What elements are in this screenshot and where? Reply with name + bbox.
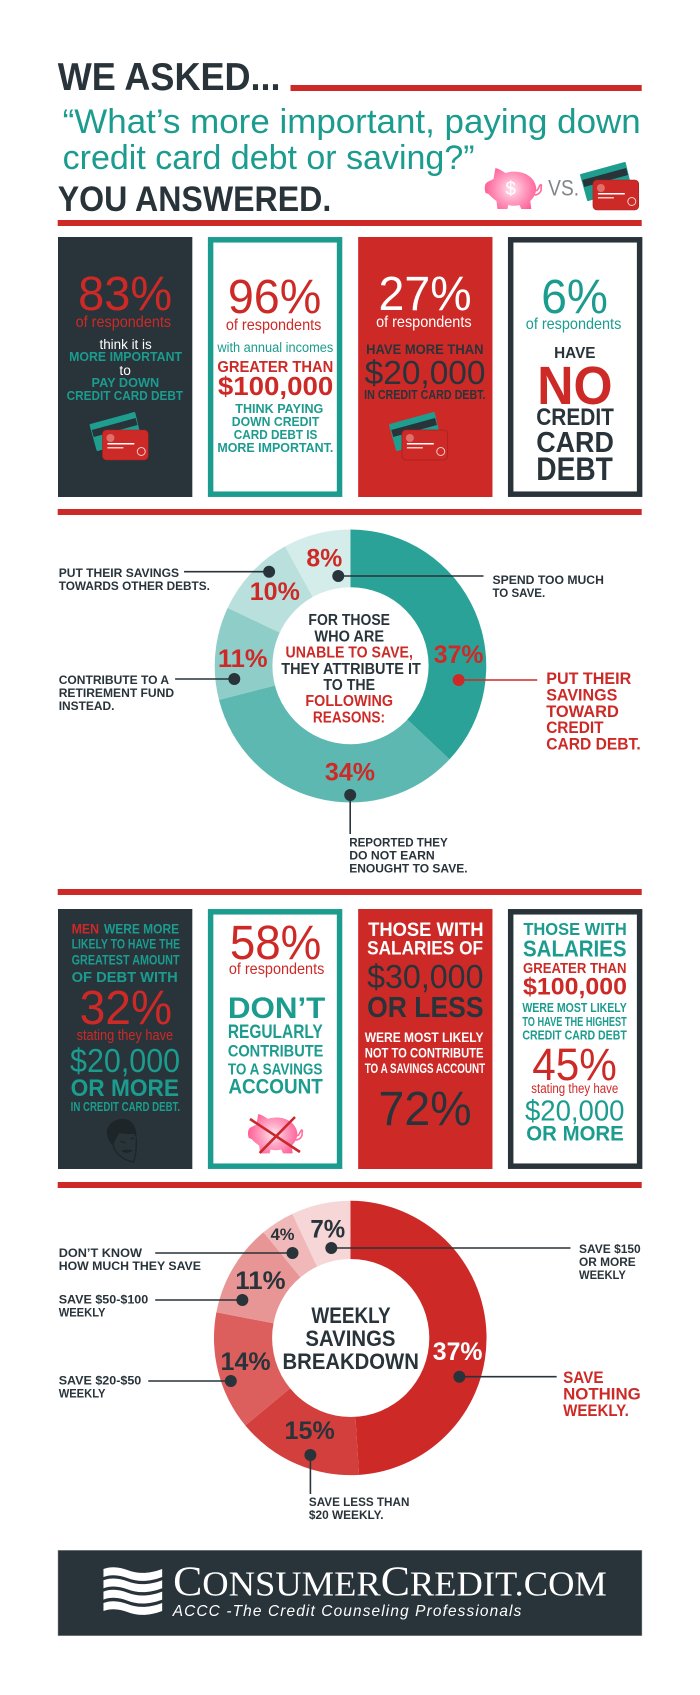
stat: 32%: 32% [80,982,172,1035]
text block: men were more likely: LIKELY TO HAVE THE [72,936,180,952]
value labels: 15% [285,1417,335,1445]
text: of respondents: of respondents [226,317,321,334]
icon: piggy bank [485,168,542,209]
panel: 58 percent [211,912,340,1166]
text: of respondents: of respondents [229,961,324,978]
center title: BREAKDOWN [283,1349,419,1374]
icon: credit cards [91,413,148,460]
slice 8% [285,530,351,666]
value labels: 37% [434,641,484,669]
text block: more important: think it is [99,336,152,352]
text block: $20,000 or more [70,1042,180,1114]
text: of respondents: of respondents [526,316,621,333]
callout: save nothing weekly [453,1369,641,1420]
text block: highest credit card debt [522,1001,627,1043]
text block: men were more likely: WERE MORE [104,921,179,937]
stat: 27%: 27% [379,268,472,321]
stat: 96%: 96% [228,271,321,324]
text block: don't regularly contribute: DON’T [228,992,325,1025]
callout: spend too much: TO SAVE. [492,586,545,600]
icon: crossed piggy bank [248,1114,302,1153]
callout: save nothing weekly: SAVE [563,1369,604,1387]
slice 7% [292,1201,351,1338]
text block: $20,000 or more: $20,000 [70,1042,180,1079]
text block: those with salaries: THOSE WITH [523,919,627,939]
stat: 58%: 58% [230,917,321,970]
callout: save $20-$50 [59,1374,237,1401]
text block: more important: to [119,362,131,378]
callout: other debts [59,566,275,593]
value labels: 34% [325,759,375,787]
text block: $20,000 or more: OR MORE [71,1075,179,1102]
center title: WEEKLY [311,1303,391,1328]
callout: credit card debt: CARD DEBT. [546,736,641,754]
question: “What’s more important, paying down [63,103,641,141]
callout: do not earn enough: ENOUGHT TO SAVE. [349,862,468,876]
text block: most likely not to contribute [365,1029,485,1076]
text block: $30,000 or less: $30,000 [367,958,484,995]
text block: those with salaries: SALARIES [523,936,626,962]
panel: men with debt [58,909,192,1169]
slice 15% [245,1338,359,1475]
text block: think paying: MORE IMPORTANT. [217,441,333,455]
text block: greater than $100,000: GREATER THAN [523,960,626,977]
callout: save $150 or more: OR MORE [579,1255,636,1269]
text: stating they have: stating they have [77,1027,173,1044]
callout: don't know: DON’T KNOW [59,1246,143,1260]
callout: save $20-$50: SAVE $20-$50 [59,1374,142,1388]
slice 11% [215,608,351,700]
text block: think paying: DOWN CREDIT [232,415,320,429]
text block: those with salaries of: SALARIES OF [367,939,483,960]
callout: other debts: TOWARDS OTHER DEBTS. [59,579,210,593]
callout: other debts: PUT THEIR SAVINGS [59,566,179,580]
center text: FOLLOWING [305,693,393,710]
text block: those with salaries of [367,920,484,960]
text block: most likely not to contribute: NOT TO CONTRIBUTE [365,1045,484,1061]
red rule [58,220,642,226]
text: stating they have: stating they have [531,1080,619,1096]
text block: think paying [217,402,333,455]
panel: 83 percent [58,237,192,497]
value labels: 8% [306,545,342,573]
callout: retirement fund [59,673,240,713]
slice 11% [216,1232,351,1338]
value labels: 11% [235,1267,286,1295]
text block: $20,000 or more: IN CREDIT CARD DEBT. [71,1100,180,1114]
callout: retirement fund: CONTRIBUTE TO A [59,673,169,687]
callout: save less than $20 [304,1449,409,1522]
donut chart: weekly savings breakdown [59,1201,641,1522]
footer logo band [58,1550,642,1636]
text block: men were more likely: GREATEST AMOUNT [72,952,180,968]
text block: have more than: IN CREDIT CARD DEBT. [364,388,486,402]
slice 14% [214,1312,351,1426]
text block: don't regularly contribute: TO A SAVINGS [228,1062,322,1079]
callout: don't know [59,1246,298,1273]
callout: credit card debt: TOWARD [546,703,619,721]
center text: REASONS: [313,710,385,727]
callout: don't know: HOW MUCH THEY SAVE [59,1259,201,1273]
callout: save less than $20: $20 WEEKLY. [309,1508,384,1522]
panel: 96 percent [211,240,340,494]
text block: don't regularly contribute [228,992,325,1099]
slice 37% [351,530,486,759]
value labels [221,1216,483,1445]
text: of respondents: of respondents [376,314,472,331]
callout: save $150 or more [325,1242,641,1282]
text block: have no credit card debt: DEBT [536,451,613,487]
infographic [58,56,642,1635]
text block: don't regularly contribute: CONTRIBUTE [228,1042,323,1061]
callout: save $20-$50: WEEKLY [59,1387,105,1401]
icon: waves [103,1567,162,1615]
text block: men were more likely: MEN [72,921,99,937]
text block: have more than: $20,000 [365,354,486,391]
panel: salaries greater than $100,000 [511,912,640,1166]
value labels: 10% [250,578,300,606]
callout: save less than $20: SAVE LESS THAN [309,1495,409,1509]
center title: SAVINGS [305,1326,395,1351]
text block: highest credit card debt: CREDIT CARD DEBT [522,1029,627,1043]
text block: $30,000 or less: OR LESS [367,992,484,1024]
text: greater than [217,359,333,401]
question [63,103,641,177]
value labels [218,545,484,787]
text block: highest credit card debt: TO HAVE THE HIGHEST [522,1015,627,1029]
value labels: 11% [218,645,268,673]
stat: 6%: 6% [541,271,608,324]
text block: $20,000 or more: $20,000 [525,1096,624,1128]
stat: 83%: 83% [78,268,172,321]
callout: retirement fund: RETIREMENT FUND [59,686,174,700]
panel: salaries of $30,000 [358,909,492,1169]
value labels: 14% [221,1348,271,1376]
slice 37% [351,1201,487,1475]
callout: save $150 or more: WEEKLY [579,1268,626,1282]
callout: credit card debt: SAVINGS [546,687,617,705]
text: greater than: GREATER THAN [217,359,333,376]
center text [281,612,421,727]
text block: those with salaries [523,919,627,962]
callout: spend too much [332,570,604,600]
value labels: 4% [271,1225,294,1244]
callout: save $50-$100: SAVE $50-$100 [59,1293,149,1307]
center text: UNABLE TO SAVE, [286,645,413,662]
question: credit card debt or saving?” [63,139,475,177]
text: with annual incomes: with annual incomes [216,339,333,355]
text block: $20,000 or more: OR MORE [526,1123,624,1146]
text block: have no credit card debt: CARD [536,427,614,459]
header [58,56,642,226]
text block: have more than [364,341,486,402]
text block: most likely not to contribute: WERE MOST LIKELY [365,1029,484,1045]
value labels: 7% [310,1216,345,1244]
slice 34% [219,666,449,802]
slice 10% [228,546,351,666]
text block: highest credit card debt: WERE MOST LIKELY [522,1001,627,1015]
icon: credit cards [581,163,639,210]
donut chart: reasons unable to save [59,530,641,876]
callout: do not earn enough [344,789,468,876]
text block: more important [67,336,183,403]
icon: man face [107,1119,136,1162]
callout: spend too much: SPEND TOO MUCH [492,573,604,587]
panel: 6 percent [511,240,640,494]
text block: greater than $100,000 [523,960,627,1001]
text block: have no credit card debt: NO [537,356,612,416]
heading: we asked: WE ASKED... [58,56,281,99]
text block: have no credit card debt: HAVE [554,345,595,362]
text: greater than: $100,000 [218,373,333,401]
callout: credit card debt [453,670,641,754]
text block: think paying: CARD DEBT IS [234,428,317,442]
text: of respondents: of respondents [76,314,171,331]
center text: TO THE [323,677,375,694]
text block: more important: PAY DOWN [92,376,159,390]
callout: save $50-$100 [59,1293,248,1320]
vs: VS. [548,175,579,201]
icon: credit cards [390,413,448,460]
text block: $30,000 or less [367,958,484,1024]
text block: don't regularly contribute: ACCOUNT [228,1076,323,1099]
text block: have no credit card debt [536,345,614,487]
red rule [291,85,642,91]
callout: do not earn enough: DO NOT EARN [349,849,435,863]
text block: men were more likely: OF DEBT WITH [72,969,178,986]
callout: retirement fund: INSTEAD. [59,699,114,713]
callout: save nothing weekly: WEEKLY. [563,1402,629,1420]
stat: 72%: 72% [379,1083,472,1136]
text block: have more than: HAVE MORE THAN [366,341,484,357]
text block: have no credit card debt: CREDIT [536,404,614,431]
center text: THEY ATTRIBUTE IT [281,661,421,678]
text block: $20,000 or more [525,1096,624,1146]
text block: more important: MORE IMPORTANT [69,350,182,364]
text block: don't regularly contribute: REGULARLY [228,1022,323,1043]
callout: credit card debt: CREDIT [546,719,604,737]
stat: 45%: 45% [532,1039,617,1090]
center text: FOR THOSE [308,612,390,629]
text block: those with salaries of: THOSE WITH [368,920,484,941]
callout: save $50-$100: WEEKLY [59,1306,105,1320]
value labels: 37% [433,1338,483,1366]
icon: piggy bank: $ [505,179,516,200]
callout: do not earn enough: REPORTED THEY [349,836,448,850]
heading: you answered: YOU ANSWERED. [58,180,331,219]
slice 4% [263,1214,351,1338]
panel: 27 percent [358,237,492,497]
center title [283,1303,419,1374]
text block: greater than $100,000: $100,000 [523,974,627,1001]
text block: more important: CREDIT CARD DEBT [67,389,183,403]
text block: most likely not to contribute: TO A SAVINGS ACCOUNT [365,1060,485,1076]
center text: WHO ARE [314,629,384,646]
callout: credit card debt: PUT THEIR [546,670,631,688]
text block: men were more likely [72,921,180,986]
tagline: ACCC -The Credit Counseling Professionals [172,1603,522,1620]
text block: think paying: THINK PAYING [235,402,323,416]
logo wordmark: CONSUMERCREDIT.COM [173,1560,607,1606]
callout: save nothing weekly: NOTHING [563,1386,641,1404]
callout: save $150 or more: SAVE $150 [579,1242,641,1256]
